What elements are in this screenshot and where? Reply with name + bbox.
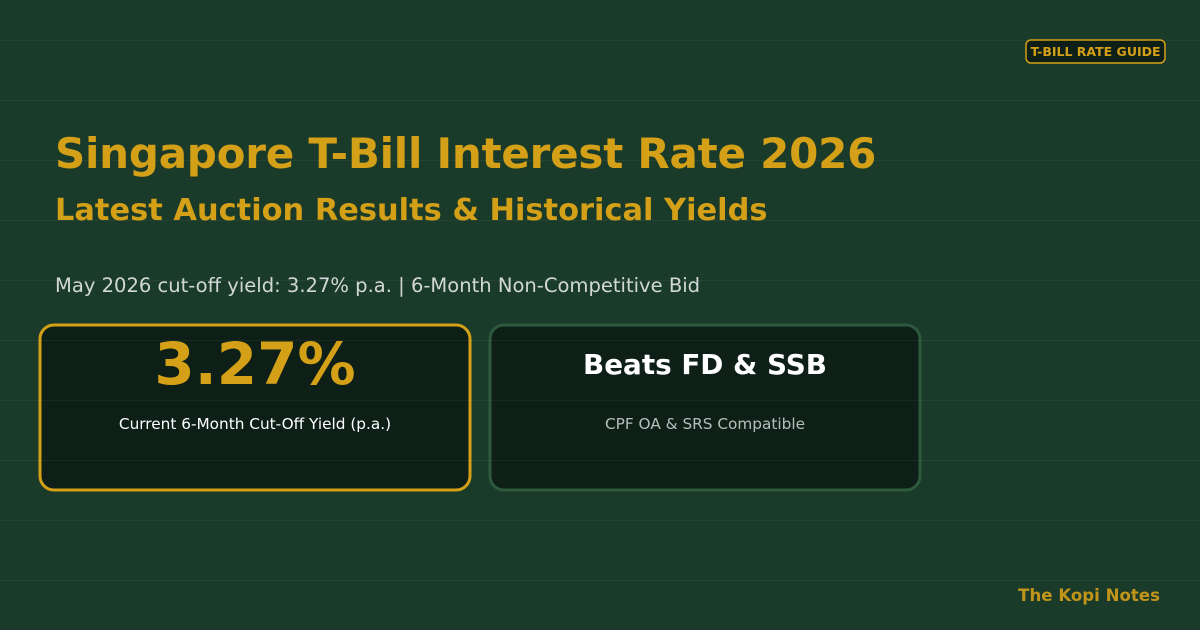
panel: comparison card xyxy=(488,324,922,492)
badge: T-Bill Rate Guide: T-BILL RATE GUIDE xyxy=(1030,44,1161,59)
subtitle: Latest Auction Results & Historical Yields xyxy=(55,193,768,228)
comparison headline: Beats FD & SSB xyxy=(583,348,827,381)
summary line: May 2026 cut-off yield: 3.27% p.a. | 6-Month Non-Competitive Bid xyxy=(55,274,700,297)
badge: T-Bill Rate Guide xyxy=(1025,39,1166,64)
panel: yield card xyxy=(38,324,472,492)
title: Singapore T-Bill Interest Rate 2026 xyxy=(55,129,876,178)
comparison caption: CPF OA & SRS Compatible xyxy=(605,415,805,433)
brand: The Kopi Notes: The Kopi Notes xyxy=(1018,586,1160,605)
yield caption: Current 6-Month Cut-Off Yield (p.a.) xyxy=(119,415,391,433)
yield value: 3.27% xyxy=(154,330,356,398)
